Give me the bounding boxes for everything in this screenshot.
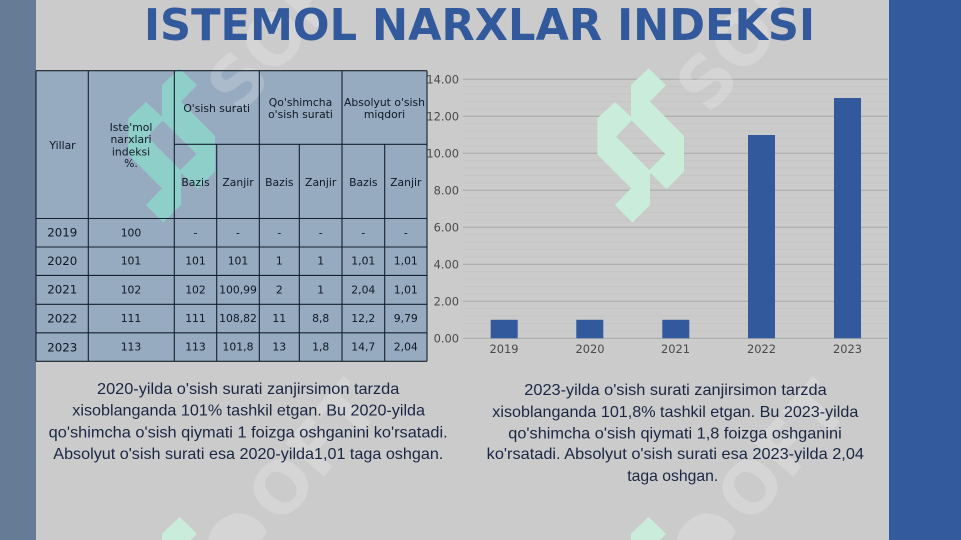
y axis labels: 0.00 [434,332,459,346]
table rows: 1 [317,254,324,268]
table header: Yillar [48,139,76,152]
year column: 2021 [47,282,77,296]
table rows: 101 [121,254,141,268]
table rows: 108,82 [219,312,257,325]
text block: 2020 explanation: qo'shimcha o'sish qiymati 1 foizga oshganini ko'rsatadi. [49,425,448,442]
watermark fragment: bottom left, cut-off first letter [208,513,267,540]
table rows: - [319,226,323,240]
table rows: 111 [185,312,206,325]
text block: 2020 explanation: 2020-yilda o'sish surati zanjirsimon tarzda [97,381,399,398]
table rows: 101,8 [223,340,254,354]
watermark text: bottom left: OFT [232,366,395,537]
table background [36,71,427,361]
x axis labels: 2022 [747,342,776,356]
y axis labels [426,73,459,346]
table header: Zanjir [390,176,422,189]
watermark logo: bottom left [162,517,197,540]
table rows: 2,04 [394,340,418,354]
table rows: 111 [121,312,141,325]
y axis labels: 8.00 [434,184,459,198]
watermark text: bottom right: OFT [701,366,864,537]
table rows [121,226,418,354]
watermark logo: table [128,68,215,223]
table header: Bazis [349,176,378,189]
table header: o'sish surati [268,108,333,121]
table rows: 1,8 [312,340,329,354]
y axis labels: 2.00 [434,295,459,309]
table header: O'sish surati [183,102,250,115]
table rows: 101 [228,254,248,268]
table rows: 113 [121,340,141,354]
watermark logo: chart [597,68,684,223]
table rows: - [236,226,240,240]
table rows: - [361,226,365,240]
text block: 2023 explanation: qo'shimcha o'sish qiymati 1,8 foizga oshganini [508,425,842,442]
table rows: 100,99 [219,284,257,296]
text block: 2020 explanation: Absolyut o'sish surati esa 2020-yilda1,01 taga oshgan. [53,446,443,463]
table rows: 8,8 [312,312,329,325]
table rows: 100 [121,226,141,240]
year column [47,226,77,354]
title: ISTEMOL NARXLAR INDEKSI [144,0,815,51]
table rows: 1,01 [351,254,375,268]
table rows: 2,04 [351,284,375,296]
table rows: 1 [317,284,324,296]
table header: Bazis [181,176,210,189]
table rows: 12,2 [351,312,375,325]
x axis labels: 2023 [833,342,862,356]
table header: Zanjir [222,176,254,189]
table rows: 113 [185,340,206,354]
year column: 2023 [47,340,77,354]
data table [36,71,427,361]
text block: 2023 explanation: taga oshgan. [627,468,718,485]
table header: narxlari [110,133,152,146]
table header: miqdori [364,108,405,121]
table rows: 9,79 [394,312,418,325]
table rows: - [404,226,408,240]
table rows: - [194,226,198,240]
table rows: 1,01 [394,254,418,268]
y axis labels: 4.00 [434,258,459,272]
table rows: 14,7 [351,340,375,354]
text block: 2020 explanation [49,381,448,463]
table header: Iste'mol [110,121,152,134]
x axis labels: 2020 [576,342,604,356]
x axis labels: 2021 [661,342,690,356]
x axis labels: 2019 [490,342,518,356]
text block: 2023 explanation: xisoblanganda 101,8% tashkil etgan. Bu 2023-yilda [492,404,858,421]
bars [491,98,861,338]
y axis labels: 12.00 [426,110,459,124]
y axis labels: 14.00 [426,73,459,87]
table header: indeksi [112,146,150,158]
bar chart [426,73,888,356]
text block: 2023 explanation: 2023-yilda o'sish surati zanjirsimon tarzda [524,382,827,399]
left side band [0,0,36,540]
table header: Absolyut o'sish [344,96,425,109]
text block: 2023 explanation [487,382,864,485]
text block: 2020 explanation: xisoblanganda 101% tashkil etgan. Bu 2020-yilda [72,403,425,420]
table rows: 2 [276,284,283,296]
table header [48,96,425,189]
table rows: - [277,226,281,240]
y axis labels: 10.00 [426,147,459,161]
table rows: 1 [276,254,283,268]
table rows: 13 [272,340,286,354]
year column: 2019 [47,226,77,240]
table header: %. [124,157,138,170]
right side band [889,0,961,540]
table rows: 11 [272,312,286,325]
watermark fragment: bottom right, cut-off first letter [677,513,736,540]
table header: Zanjir [305,176,337,189]
table rows: 102 [121,284,141,296]
y axis labels: 6.00 [434,221,459,235]
table header: Qo'shimcha [269,96,332,109]
year column: 2022 [47,312,77,326]
table rows: 1,01 [394,284,418,296]
table rows: 101 [185,254,206,268]
table header: Bazis [265,176,294,189]
year column: 2020 [47,254,77,268]
x axis labels [490,342,862,356]
text block: 2023 explanation: ko'rsatadi. Absolyut o'sish surati esa 2023-yilda 2,04 [487,446,864,463]
table rows: 102 [185,284,206,296]
watermark logo: bottom right [631,517,666,540]
